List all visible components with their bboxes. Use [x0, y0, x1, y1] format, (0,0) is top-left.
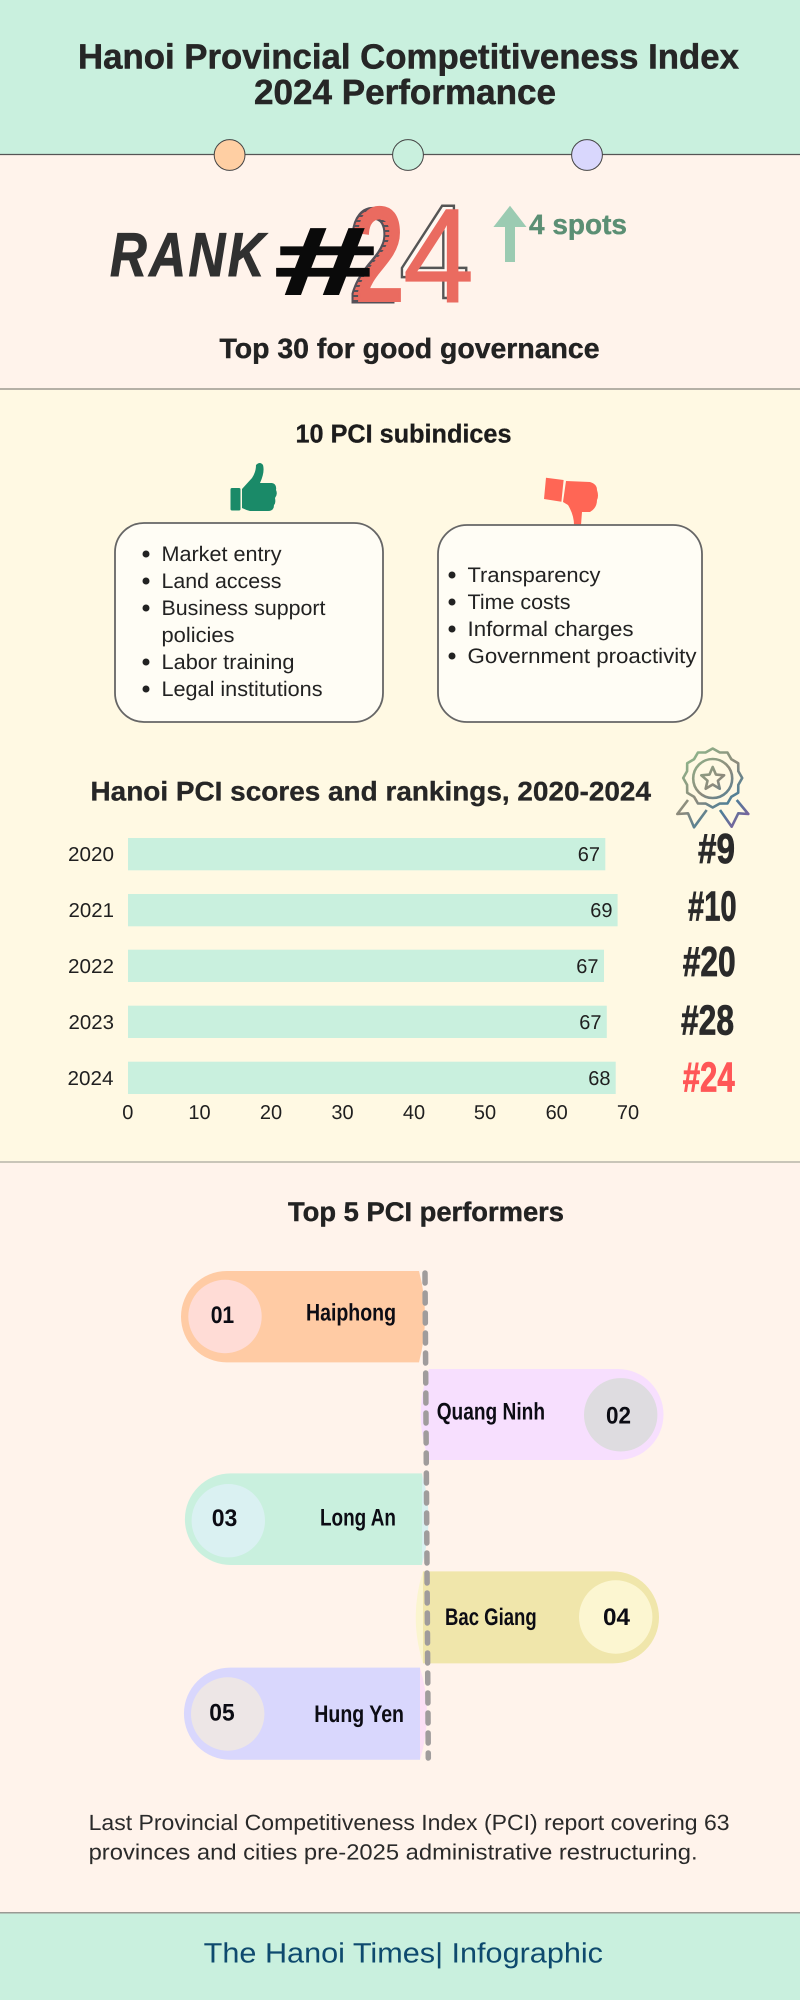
performer 04: 04 [603, 1604, 631, 1631]
panel: subindices and scores [0, 388, 800, 1162]
panel: strengths: Business support [162, 597, 326, 620]
bars [128, 838, 618, 1094]
x axis ticks: 60 [546, 1102, 568, 1124]
rankings [681, 825, 737, 1100]
footer credit: The Hanoi Times| Infographic [204, 1938, 603, 1969]
heading: scores: Hanoi PCI scores and rankings, 2020-2024 [90, 777, 651, 807]
x axis ticks: 20 [260, 1102, 282, 1124]
bar chart [68, 838, 639, 1124]
title [78, 38, 740, 112]
panel: weaknesses: Informal charges [468, 618, 634, 641]
performer 02 [421, 1369, 664, 1460]
panel: strengths: policies [162, 624, 234, 647]
subtitle: Top 30 for good governance [220, 333, 600, 364]
icon: thumbs down [544, 478, 598, 525]
rankings: #9 [698, 825, 735, 872]
performer 05: Hung Yen [314, 1701, 404, 1728]
performer 01 [181, 1271, 425, 1362]
panel: header [0, 0, 800, 154]
x axis ticks: 40 [403, 1102, 425, 1124]
rank number 24: 2 [348, 182, 398, 331]
x axis ticks: 10 [188, 1102, 211, 1124]
performer 03: Long An [320, 1504, 396, 1532]
rank number 24 [348, 178, 474, 331]
panel: strengths: Labor training [162, 651, 294, 674]
value labels: 69 [590, 900, 612, 922]
panel: top performers [0, 1161, 800, 1913]
performer 02: 02 [606, 1402, 631, 1429]
panel: strengths: Market entry [162, 543, 282, 566]
x axis ticks: 30 [331, 1102, 354, 1124]
rankings: #10 [688, 882, 737, 929]
value labels: 67 [576, 956, 598, 978]
performer 02: Quang Ninh [437, 1398, 545, 1425]
arrow up [493, 206, 526, 262]
performer 04 [416, 1571, 659, 1663]
performer 03: 03 [212, 1505, 237, 1532]
rank label: RANK [110, 221, 268, 290]
rank hash mark: # [279, 211, 371, 313]
icon: thumbs up [230, 463, 277, 511]
year labels [68, 844, 114, 1090]
panel: strengths [115, 523, 383, 722]
year labels: 2023 [68, 1012, 114, 1034]
rank number 24: 2 [355, 181, 404, 328]
heading: subindices: 10 PCI subindices [296, 419, 512, 449]
title: 2024 Performance [254, 73, 556, 112]
year labels: 2024 [68, 1068, 114, 1090]
year labels: 2021 [68, 900, 114, 922]
performer 04: Bac Giang [445, 1604, 537, 1631]
rankings: #28 [681, 996, 734, 1043]
year labels: 2020 [68, 844, 114, 866]
rank number 24: 4 [399, 178, 470, 327]
footnote: provinces and cities pre-2025 administrative restructuring. [89, 1839, 698, 1864]
rankings: #20 [683, 938, 736, 985]
performer 05 [184, 1668, 427, 1760]
panel: footer [0, 1912, 800, 2000]
rank number 24: 4 [403, 182, 474, 331]
dashed timeline [425, 1273, 428, 1758]
panel: weaknesses: Time costs [468, 591, 570, 614]
value labels [576, 844, 612, 1090]
panel: weaknesses [438, 525, 702, 722]
performer 05: 05 [209, 1699, 235, 1726]
rankings: #24 [683, 1053, 735, 1100]
performer 01: Haiphong [306, 1300, 396, 1327]
panel: weaknesses: Transparency [468, 564, 601, 587]
x axis ticks: 50 [474, 1102, 496, 1124]
x axis ticks: 0 [122, 1102, 133, 1124]
footnote [89, 1810, 730, 1864]
rank change: 4 spots [529, 209, 627, 240]
value labels: 68 [588, 1068, 610, 1090]
footnote: Last Provincial Competitiveness Index (PCI) report covering 63 [89, 1810, 730, 1835]
panel: rank [0, 140, 800, 389]
x axis ticks [122, 1102, 639, 1124]
x axis ticks: 70 [617, 1102, 639, 1124]
panel: weaknesses: Government proactivity [468, 645, 697, 668]
panel: strengths: Land access [162, 570, 282, 593]
value labels: 67 [578, 844, 600, 866]
year labels: 2022 [68, 956, 114, 978]
icon: medal [677, 748, 748, 827]
value labels: 67 [579, 1012, 602, 1034]
performer 01: 01 [211, 1302, 234, 1329]
title: Hanoi Provincial Competitiveness Index [78, 38, 740, 76]
panel: strengths: Legal institutions [162, 678, 322, 701]
performer 03 [185, 1473, 428, 1565]
header dots [214, 140, 602, 170]
heading: top performers: Top 5 PCI performers [288, 1197, 564, 1227]
